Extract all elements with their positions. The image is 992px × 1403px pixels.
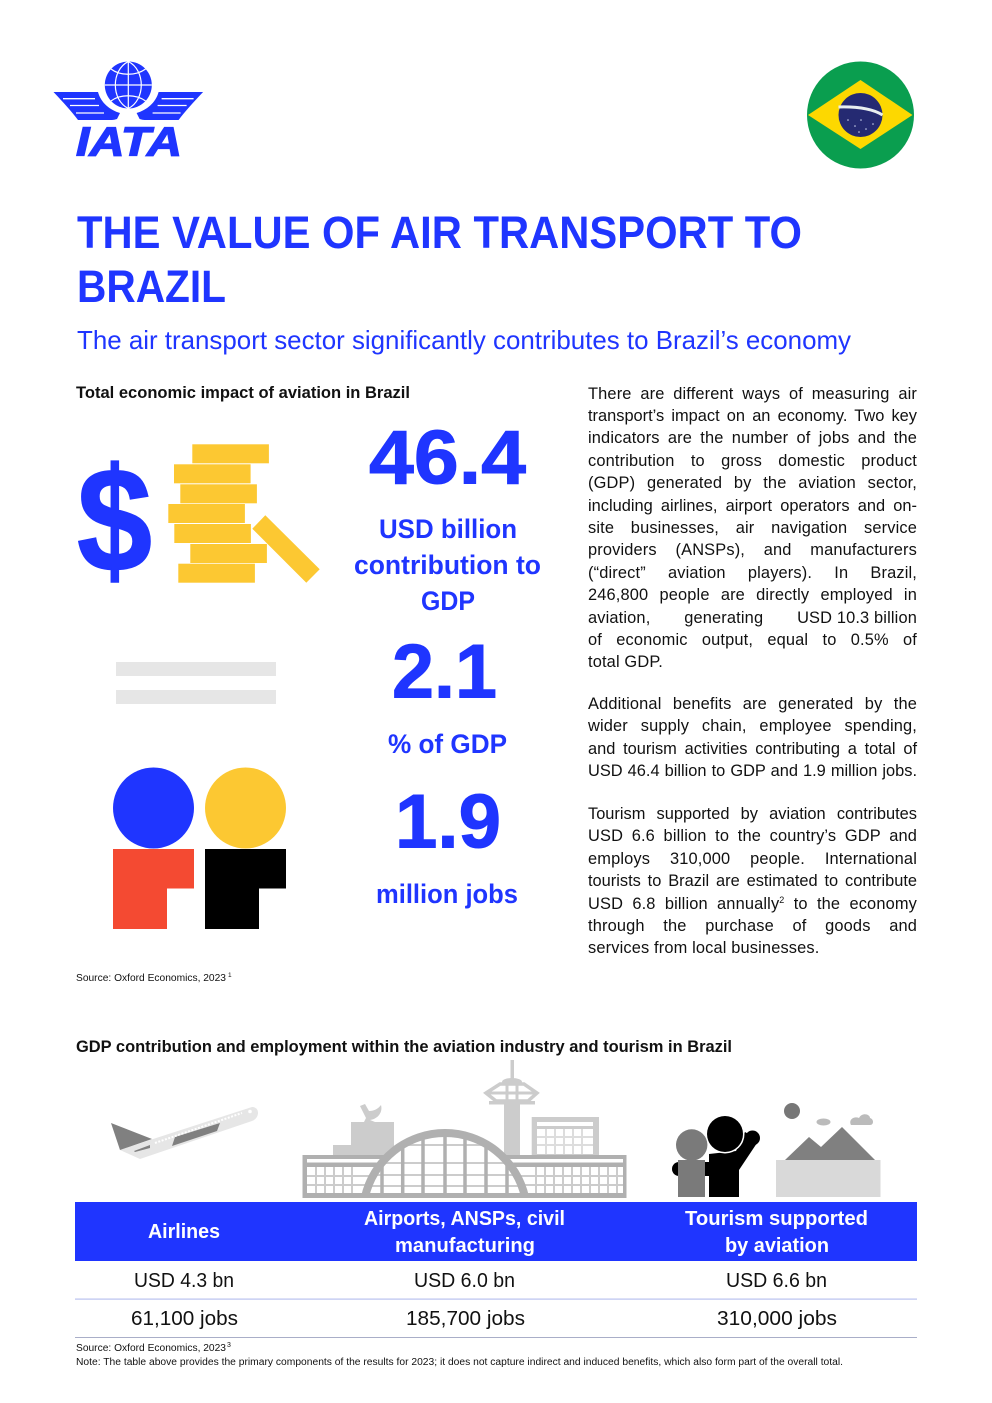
text block: tourism: through the purchase of goods and (588, 917, 917, 935)
icon: dollar sign: $ (77, 438, 152, 603)
stat label: USD billion contribution to GDP (354, 514, 541, 616)
icon: tourists (672, 1114, 760, 1197)
table header: Tourism supported (685, 1208, 868, 1230)
stat: 2.1: 2.1 (392, 630, 497, 714)
text block: additional benefits: Additional benefits are generated by the (588, 695, 917, 713)
title (77, 207, 802, 312)
text block: measuring impact: (“direct” aviation players). In Brazil, (588, 564, 917, 582)
text block: tourism: services from local businesses. (588, 939, 819, 957)
table header: by aviation (725, 1235, 829, 1257)
icon: coin stack (168, 444, 320, 583)
table header: Airports, ANSPs, civil (364, 1208, 565, 1230)
text block: measuring impact: indicators are the number of jobs and the (588, 429, 917, 447)
stat label: % of GDP: % of GDP (388, 729, 507, 759)
decorative placeholder bars (116, 662, 276, 704)
subtitle: The air transport sector significantly contributes to Brazil’s economy (77, 325, 851, 355)
table row: jobs: 185,700 jobs (406, 1308, 525, 1330)
text block: tourism: USD 6.8 billion annually2 to the economy (588, 895, 917, 913)
icon: people (113, 768, 286, 929)
text block: measuring impact: site businesses, air navigation service (588, 519, 917, 537)
table row: jobs: 310,000 jobs (717, 1308, 837, 1330)
table header: Airlines (148, 1221, 220, 1243)
text block: measuring impact: transport’s impact on an economy. Two key (588, 407, 917, 425)
table row: GDP (134, 1270, 827, 1292)
text block: measuring impact: providers (ANSPs), and manufacturers (588, 541, 917, 559)
source note 1: 1 (228, 972, 232, 979)
table (75, 1202, 917, 1338)
text block: measuring impact (588, 384, 917, 671)
table header (75, 1202, 917, 1261)
icon: Brazil flag (807, 62, 914, 168)
text block: measuring impact: 246,800 people are directly employed in (588, 586, 917, 604)
icon: airplane (111, 1107, 258, 1159)
text block: tourism: employs 310,000 people. International (588, 850, 917, 868)
stat: 46.4: 46.4 (369, 416, 526, 500)
stat label: USD billion contribution to GDP: GDP (421, 586, 475, 616)
text block: tourism: Tourism supported by aviation contributes (588, 805, 917, 823)
text block: measuring impact: contribution to gross domestic product (588, 452, 917, 470)
text block: tourism (588, 805, 917, 957)
heading: GDP contribution and employment: GDP contribution and employment within the aviation industry and tourism in Brazil (76, 1038, 732, 1056)
text block: additional benefits (588, 695, 918, 780)
text block: tourism: USD 6.6 billion to the country’s GDP and (588, 827, 917, 845)
table row: GDP: USD 4.3 bn (134, 1270, 234, 1292)
text block: measuring impact: (GDP) generated by the aviation sector, (588, 474, 917, 492)
text block: measuring impact: including airlines, airport operators and on- (588, 497, 917, 515)
stat label: USD billion contribution to GDP: USD billion (379, 514, 517, 544)
title: THE VALUE OF AIR TRANSPORT TO (77, 207, 802, 258)
table row: jobs (131, 1308, 837, 1330)
text block: additional benefits: and tourism activities contributing a total of (588, 740, 917, 758)
source and note: Source: Oxford Economics, 2023 (76, 1343, 226, 1354)
heading: total economic impact: Total economic impact of aviation in Brazil (76, 384, 410, 402)
building with satellite dish (333, 1104, 394, 1156)
table header: manufacturing (395, 1235, 535, 1257)
source and note: 3 (227, 1342, 231, 1349)
source note 1: Source: Oxford Economics, 2023 (76, 973, 226, 984)
text block: measuring impact: total GDP. (588, 653, 663, 671)
stat label: USD billion contribution to GDP: contribution to (354, 550, 541, 580)
stat label: million jobs: million jobs (376, 879, 518, 909)
logo: IATA: IATA (76, 118, 182, 164)
source and note (76, 1342, 843, 1368)
source and note: Note: The table above provides the primary components of the results for 2023; it does not capture indirect and induced benefits, which also form part of the overall total. (76, 1357, 843, 1368)
text block: measuring impact: There are different ways of measuring air (588, 384, 917, 402)
terminal (302, 1129, 626, 1198)
office block (532, 1117, 599, 1155)
title: BRAZIL (77, 261, 226, 312)
text block: tourism: tourists to Brazil are estimated to contribute (588, 872, 917, 890)
stat: 1.9: 1.9 (395, 780, 501, 864)
text block: measuring impact: USD 10.3 billion (797, 609, 917, 627)
table row: jobs: 61,100 jobs (131, 1308, 238, 1330)
icon: airport (302, 1060, 626, 1198)
text block: additional benefits: USD 46.4 billion to GDP and 1.9 million jobs. (588, 762, 917, 780)
logo: IATA (54, 62, 203, 164)
table row: GDP: USD 6.0 bn (414, 1270, 515, 1292)
control tower (486, 1060, 537, 1156)
text block: additional benefits: wider supply chain, employee spending, (588, 717, 917, 735)
text block: measuring impact: of economic output, equal to 0.5% of (588, 631, 917, 649)
table row: GDP: USD 6.6 bn (726, 1270, 827, 1292)
text block: measuring impact: aviation, generating (588, 609, 763, 627)
icon: landscape (776, 1103, 880, 1197)
